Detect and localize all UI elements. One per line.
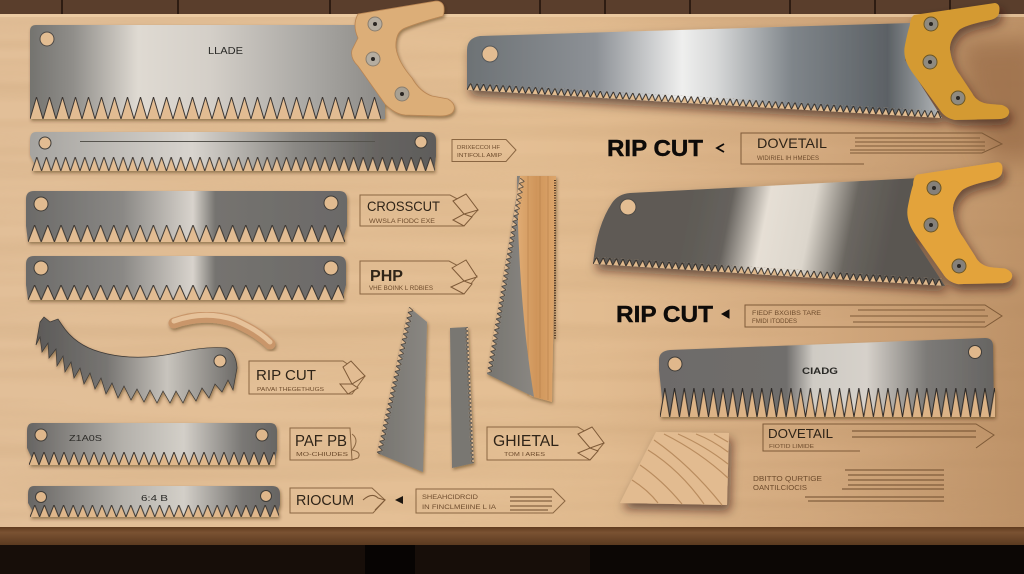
label: arrow box 2: FMIDI ITODDES xyxy=(752,318,798,325)
text block with lines bottom right: OANTILCIOCIS xyxy=(753,485,807,492)
label: GHIETAL xyxy=(487,427,604,460)
label: PHP: VHE BOINK L RDBIES xyxy=(369,286,433,292)
saw 1 teeth xyxy=(30,97,381,119)
saw 6: short blade xyxy=(27,423,277,465)
label: CROSSCUT: WWSLA FIODC EXE xyxy=(369,219,435,225)
saw 2: long narrow blade xyxy=(30,132,436,171)
saw 1 label: LLADE xyxy=(208,46,243,57)
label: GHIETAL: TOM I ARES xyxy=(504,452,545,458)
label: arrow box 2: FIEDF BXGIBS TARE xyxy=(752,310,822,317)
label: small tag beside saw 2 xyxy=(452,140,516,162)
narrow vertical blade xyxy=(450,327,474,468)
saw 7: bottom blade: 6:4 B xyxy=(141,494,168,503)
saw 10: comb toothed blade: CIADG xyxy=(802,366,838,377)
saw 1 hole xyxy=(40,32,54,46)
label: arrow box 2 xyxy=(745,305,1002,327)
label: PHP xyxy=(360,260,477,294)
text block with lines bottom right xyxy=(753,470,944,501)
saw 8 handle xyxy=(904,3,1009,120)
label: RIP CUT tag: RIP CUT xyxy=(256,368,316,384)
label: RIOCUM xyxy=(290,488,385,513)
label: DOVETAIL arrow box 2 xyxy=(763,424,994,451)
label: RIP CUT tag: PAIVAI THEGETHUGS xyxy=(257,387,324,393)
vertical blade with wooden cheek xyxy=(487,176,556,402)
arrow: small chevron xyxy=(395,496,403,504)
label: GHIETAL: GHIETAL xyxy=(493,433,559,450)
saw 10: comb toothed blade xyxy=(659,338,995,417)
wood block xyxy=(620,432,729,505)
label: PAF PB xyxy=(290,428,359,460)
saw 1: wood handled crosscut saw xyxy=(30,1,454,119)
vertical toothed blade xyxy=(377,307,427,472)
label: RIP CUT heading 2: RIP CUT xyxy=(616,301,713,327)
label: CROSSCUT xyxy=(360,194,478,226)
arrow: chevron 1 xyxy=(717,144,724,152)
saw 1 handle xyxy=(352,1,454,116)
label: DOVETAIL arrow box 1: WIDIRIEL IH HMEDES xyxy=(757,155,820,162)
curved wooden piece xyxy=(174,315,270,344)
saw 6: short blade: Z1A0S xyxy=(69,434,102,443)
label: arrow box bottom centre: SHEAHCIDRCID xyxy=(422,495,479,501)
label: DOVETAIL arrow box 1 xyxy=(741,133,1002,164)
label: PAF PB: PAF PB xyxy=(295,433,347,450)
text block with lines bottom right: DBITTO QURTIGE xyxy=(753,476,822,483)
label: PHP: PHP xyxy=(370,268,403,285)
saw 3: medium blade xyxy=(26,191,347,242)
label: DOVETAIL arrow box 2: DOVETAIL xyxy=(768,426,833,441)
label: small tag beside saw 2: DRIXECCOI HF xyxy=(457,145,501,151)
label: PAF PB: MO-CHIUDES xyxy=(296,452,348,458)
saw 4: medium blade xyxy=(26,256,346,300)
label: DOVETAIL arrow box 1: DOVETAIL xyxy=(757,135,827,151)
saw 9 handle xyxy=(907,162,1012,284)
label: CROSSCUT: CROSSCUT xyxy=(367,198,440,214)
label: DOVETAIL arrow box 2: FIOTID LIMIDE xyxy=(769,444,814,450)
label: RIP CUT heading 1: RIP CUT xyxy=(607,135,703,161)
label: arrow box bottom centre xyxy=(416,489,565,513)
label: RIOCUM: RIOCUM xyxy=(296,492,354,509)
label: small tag beside saw 2: INTIFOLL AMIP xyxy=(457,153,502,159)
arrow: chevron 2 xyxy=(722,310,729,318)
saw 9: middle right saw with orange handle xyxy=(593,162,1012,286)
label: RIP CUT tag xyxy=(249,361,365,394)
saw 8: top right saw with yellow handle xyxy=(467,3,1009,120)
label: arrow box bottom centre: IN FINCLMEIINE L IA xyxy=(422,505,496,511)
saw 7: bottom blade xyxy=(28,486,280,517)
saw 5: curved blade xyxy=(36,317,237,403)
